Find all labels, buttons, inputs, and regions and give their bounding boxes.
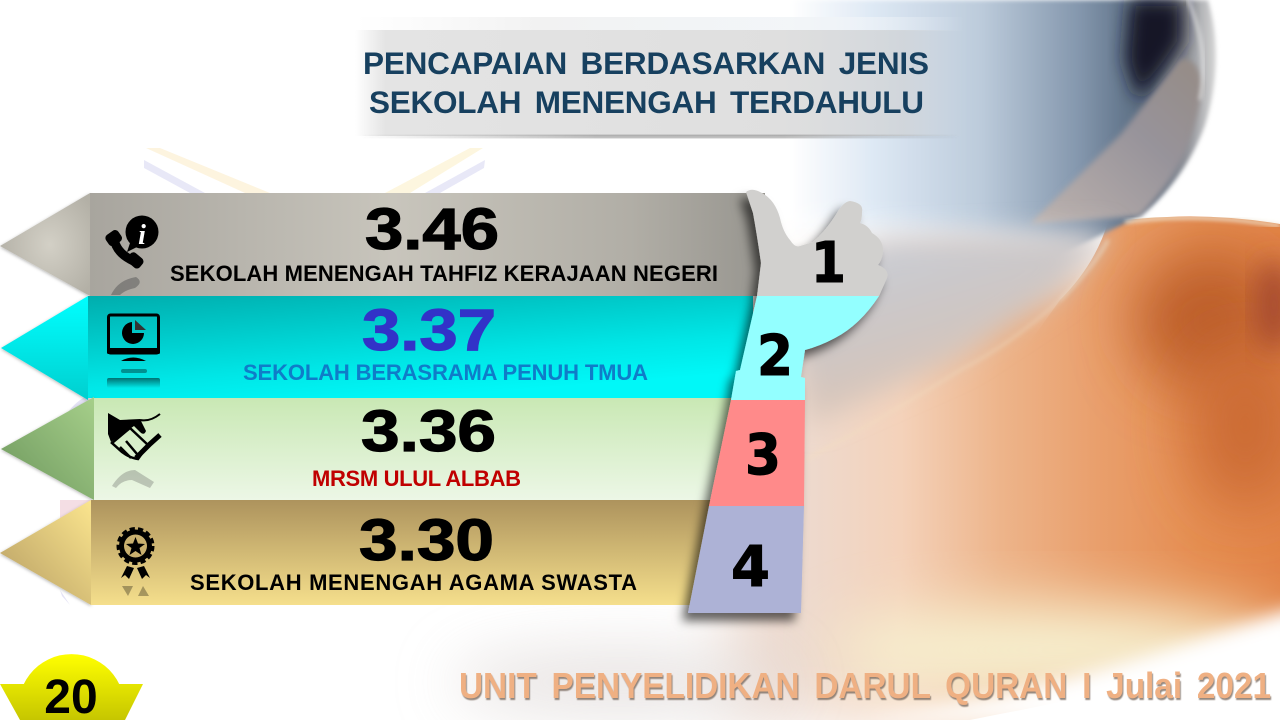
background: white sweep under the orange shape — [860, 606, 1280, 720]
icon: phone with info bubble: i — [138, 220, 146, 251]
title: SEKOLAH MENENGAH TERDAHULU — [369, 84, 924, 120]
row 1 band — [90, 193, 765, 296]
icon: award medal — [119, 530, 152, 596]
background: crease highlight — [1060, 240, 1108, 300]
background: pale light rim on orange shape — [1125, 218, 1280, 226]
row 3 arrow — [1, 397, 94, 500]
row 2 band — [88, 296, 753, 398]
row 4 band — [91, 500, 716, 605]
row 1 label: SEKOLAH MENENGAH TAHFIZ KERAJAAN NEGERI — [170, 261, 718, 286]
row 4: Sekolah Menengah Agama Swasta — [0, 500, 716, 605]
title: PENCAPAIAN BERDASARKAN JENIS — [363, 45, 929, 81]
page number badge — [0, 654, 143, 720]
thumbs-up ranking graphic — [688, 190, 888, 613]
row 2 arrow — [1, 296, 88, 400]
background: orange lower shape — [705, 216, 1280, 720]
row 4 value: 3.30 — [359, 508, 494, 573]
background: grey haze at lower centre — [450, 646, 790, 718]
row 3 band — [94, 398, 739, 500]
row 1 value: 3.46 — [365, 197, 499, 262]
icon: handshake — [108, 413, 160, 488]
row 4 label: SEKOLAH MENENGAH AGAMA SWASTA — [190, 570, 637, 595]
row 1: Sekolah Menengah Tahfiz Kerajaan Negeri — [0, 193, 765, 296]
icon: monitor with pie chart — [107, 315, 160, 388]
thumb shape with shadow — [688, 190, 888, 613]
faded logo watermark — [58, 148, 485, 605]
row 4 arrow — [0, 500, 91, 605]
rank 4: 4 — [731, 535, 770, 600]
title — [363, 45, 929, 120]
row 1 arrow — [0, 193, 90, 296]
icon: phone with info bubble — [104, 216, 158, 295]
background: grey-tan shoulder between head and orange — [790, 232, 1110, 425]
row 3 label: MRSM ULUL ALBAB — [312, 466, 521, 491]
row 2: Sekolah Berasrama Penuh TMUA — [1, 296, 753, 400]
background: abstract blue head shape — [810, 0, 1218, 248]
row 3: MRSM Ulul Albab — [1, 397, 739, 500]
panel: title band — [355, 17, 965, 138]
row 2 label: SEKOLAH BERASRAMA PENUH TMUA — [243, 360, 648, 385]
rank 2: 2 — [757, 324, 793, 389]
rank 1: 1 — [811, 231, 846, 296]
row 3 value: 3.36 — [361, 399, 496, 464]
row 2 value: 3.37 — [362, 298, 496, 363]
rank 3: 3 — [745, 423, 781, 488]
